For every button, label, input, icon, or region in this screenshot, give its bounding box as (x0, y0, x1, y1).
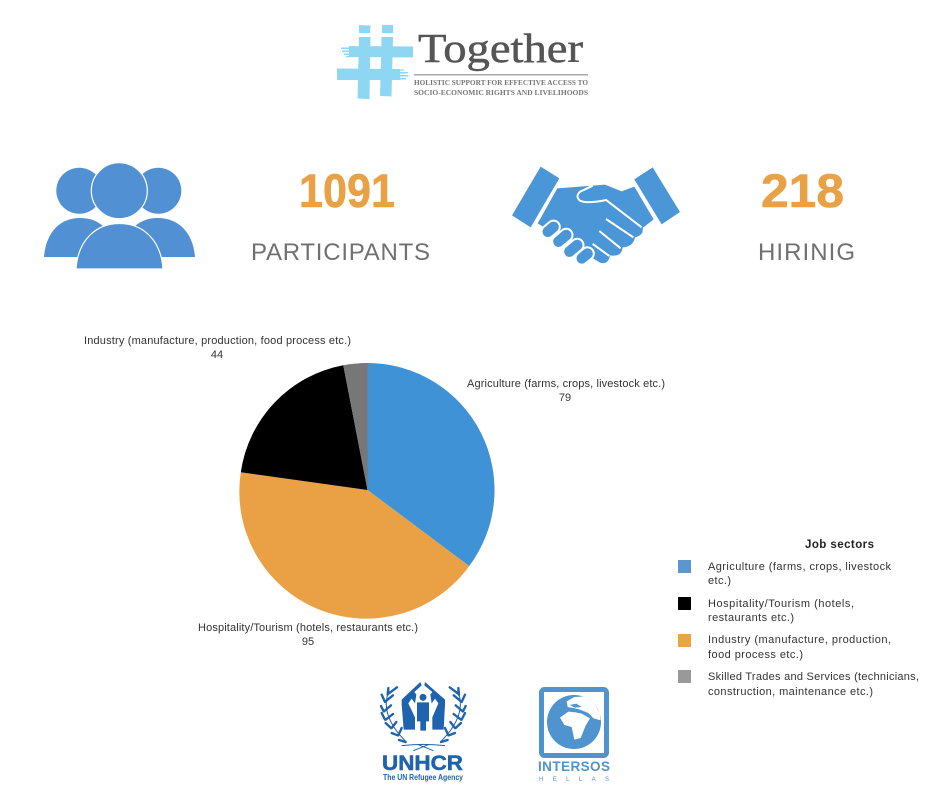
logo tagline: SOCIO-ECONOMIC RIGHTS AND LIVELIHOODS (414, 88, 588, 97)
INTERSOS text: INTERSOS (538, 759, 610, 774)
HELLAS text: HELLAS (539, 777, 609, 783)
wreath ribbon (402, 744, 445, 751)
pie label: industry (84, 335, 351, 361)
slice: skilled trades (343, 363, 368, 490)
UNHCR tagline: The UN Refugee Agency (383, 773, 463, 782)
legend: job sectors (678, 539, 919, 698)
stat: participants (251, 164, 430, 266)
pie label: agriculture: 79 (559, 392, 571, 404)
pie label: industry: 44 (211, 349, 223, 361)
legend item: agriculture: Agriculture (farms, crops, livestock (708, 561, 892, 573)
logo tagline (414, 78, 588, 97)
legend item: industry: Industry (manufacture, production, (708, 634, 891, 646)
slice: industry (239, 472, 469, 619)
right hand (424, 682, 445, 730)
icon: hashtag of hands (337, 25, 413, 99)
pie label: hospitality (198, 622, 418, 648)
pie chart: job sectors (239, 363, 495, 619)
pie label: agriculture (467, 378, 665, 404)
legend title: Job sectors (805, 539, 874, 551)
pie label: agriculture: Agriculture (farms, crops, livestock etc.) (467, 378, 665, 390)
legend item: skilled trades: Skilled Trades and Services (technicians, (708, 671, 919, 683)
globe (547, 695, 601, 749)
legend item: industry: food process etc.) (708, 649, 803, 661)
legend item: skilled trades (678, 670, 919, 698)
frame (542, 690, 606, 756)
slice: agriculture (368, 363, 495, 566)
icon: handshake (512, 167, 680, 267)
number: 218: 218 (761, 164, 844, 217)
label: hiring: HIRINIG (758, 239, 855, 266)
legend item: hospitality (678, 597, 854, 624)
legend item: agriculture (678, 560, 892, 587)
label: participants: PARTICIPANTS (251, 239, 430, 266)
left hand (402, 682, 422, 730)
person (417, 694, 429, 731)
pie label: industry: Industry (manufacture, production, food process etc.) (84, 335, 351, 347)
slice: hospitality (241, 365, 368, 490)
left laurel (381, 687, 406, 742)
right laurel (441, 687, 466, 742)
number: 1091: 1091 (299, 164, 395, 217)
legend item: hospitality: restaurants etc.) (708, 612, 794, 624)
emblem: hands, person and laurel wreath (381, 682, 466, 751)
logo: #Together (337, 25, 588, 99)
legend item: industry (678, 634, 891, 661)
pie label: hospitality: Hospitality/Tourism (hotels, restaurants etc.) (198, 622, 418, 634)
pie label: hospitality: 95 (302, 636, 314, 648)
legend item: skilled trades: construction, maintenance etc.) (708, 686, 873, 698)
logo: INTERSOS Hellas (538, 690, 610, 783)
legend item: hospitality: Hospitality/Tourism (hotels, (708, 598, 854, 610)
logo tagline: HOLISTIC SUPPORT FOR EFFECTIVE ACCESS TO (414, 78, 588, 87)
icon: group of people (44, 163, 195, 269)
UNHCR text: UNHCR (382, 752, 463, 775)
legend item: agriculture: etc.) (708, 575, 731, 587)
stat: hiring (758, 164, 855, 266)
logo wordmark: Together (418, 25, 583, 71)
logo: UNHCR (381, 682, 466, 782)
